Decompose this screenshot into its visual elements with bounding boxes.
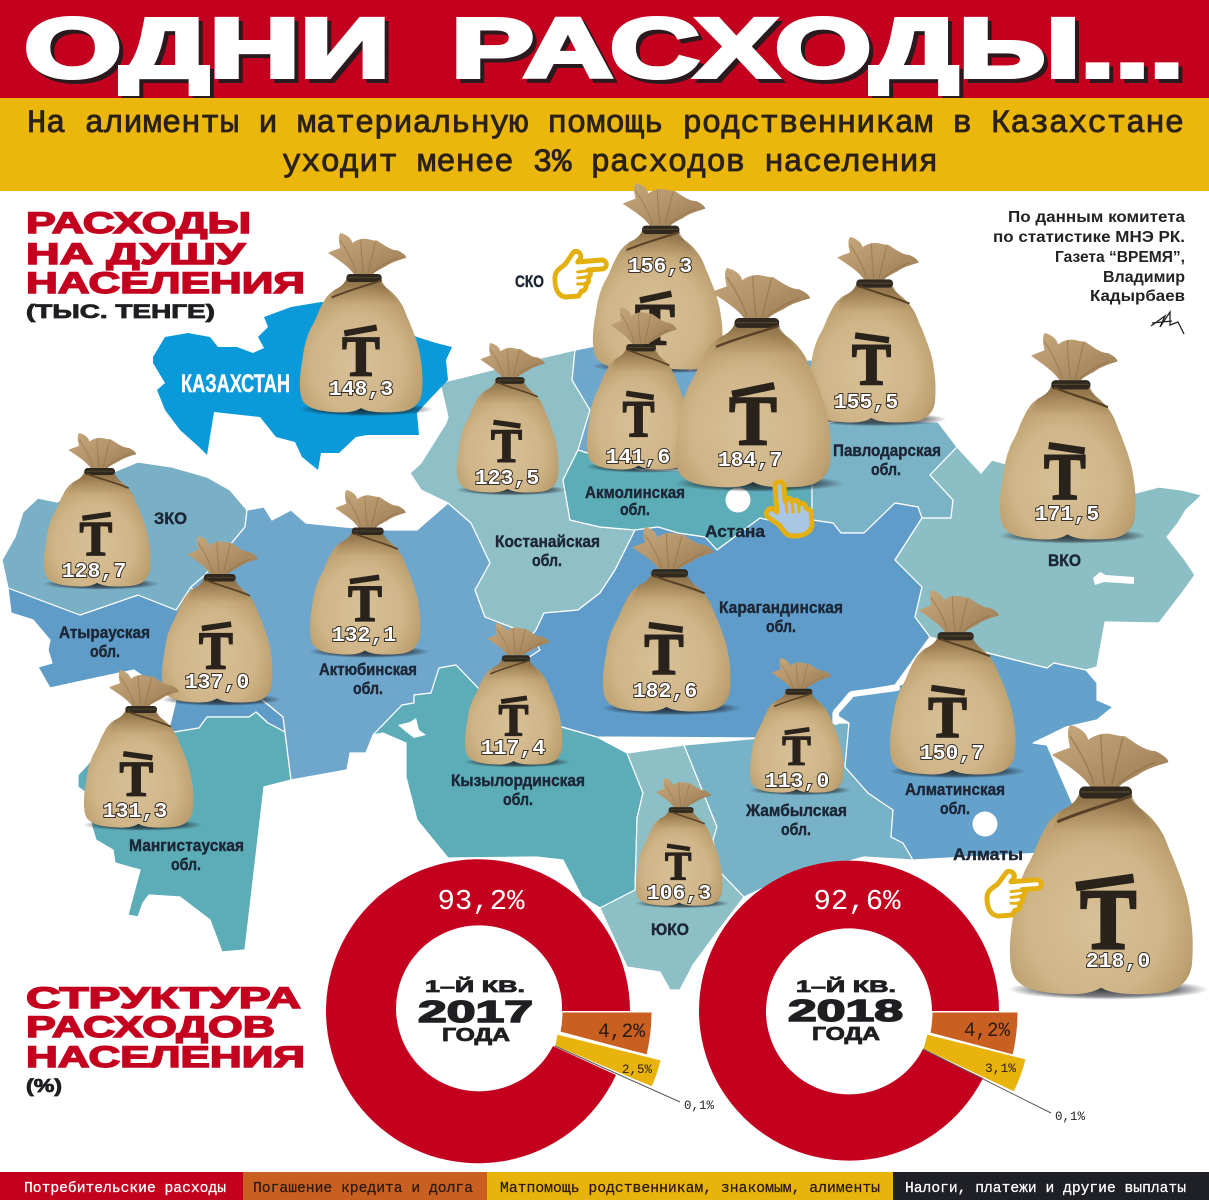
money bag: South Kazakhstan 106,3: 106,3: [647, 882, 711, 906]
region labels: ВКО: [1048, 551, 1081, 570]
money bag: Akmola 141,6: 141,6: [606, 446, 670, 470]
legend bar: Налоги, платежи и другие выплаты: [905, 1181, 1186, 1197]
region labels: обл.: [940, 799, 970, 818]
donut chart: 2017: 2017: [418, 994, 533, 1029]
money bag: Karaganda 182,6: [602, 527, 741, 715]
heading: spending structure: [26, 982, 305, 1096]
region labels: обл.: [503, 790, 533, 809]
money bag: Karaganda 182,6: Т: [644, 622, 683, 687]
legend bar: Погашение кредита и долга: [253, 1181, 473, 1197]
region: Almaty oblast: [833, 653, 1113, 860]
heading: spending structure: РАСХОДОВ: [26, 1011, 275, 1044]
donut chart: 2018: 2018: [788, 993, 903, 1028]
region labels: Жамбылская: [745, 801, 847, 820]
region labels: Костанайская: [495, 532, 600, 551]
region: West Kazakhstan: [2, 462, 247, 615]
region: Kostanay: [410, 350, 635, 635]
source credit: Кадырбаев: [1090, 288, 1185, 305]
donut chart: 2018: 4,2%: [964, 1020, 1011, 1043]
money bag: North Kazakhstan 156,3: [592, 183, 734, 373]
donut chart: 2017: 93,2%: [437, 885, 525, 918]
donut chart: 2018: 92,6%: [813, 885, 901, 918]
money bag: Akmola 141,6: [586, 307, 699, 473]
money bag: Atyrau 137,0: [161, 536, 282, 706]
title band: [0, 0, 1209, 99]
donut chart: 2017: 4,2%: [598, 1021, 646, 1044]
money bag: Mangystau 131,3: [83, 670, 203, 831]
region labels: Кызылординская: [451, 771, 585, 790]
money bag: North Kazakhstan 156,3: 156,3: [628, 255, 692, 279]
donut chart: 2018: 3,1%: [985, 1061, 1016, 1076]
heading: spending per capita: (ТЫС. ТЕНГЕ): [26, 302, 215, 323]
lake: Aral: [398, 718, 426, 738]
region labels: Атырауская: [59, 623, 150, 642]
leader line 0,1% 2017: [555, 1046, 680, 1102]
source credit: по статистике МНЭ РК.: [993, 229, 1185, 246]
lake: Balkhash: [836, 688, 897, 722]
donut chart: 2018: ГОДА: [812, 1024, 880, 1044]
money bag: North Kazakhstan 156,3: Т: [635, 291, 675, 357]
region labels: [59, 272, 1081, 939]
map of Kazakhstan regions: [2, 345, 1202, 990]
region labels: ЮКО: [651, 920, 689, 939]
label: Kazakhstan: КАЗАХСТАН: [181, 370, 290, 398]
mini map: Kazakhstan: [153, 302, 452, 470]
money bag: Almaty oblast 150,7: [889, 590, 1026, 778]
icon: hand pointing to North Kazakhstan: [555, 251, 606, 297]
donut chart: 2017: 2,5%: [622, 1062, 652, 1077]
money bag: Aktobe 132,1: 132,1: [332, 624, 396, 648]
money bag: Almaty oblast 150,7: Т: [928, 684, 967, 750]
donut chart: 2018: 1–Й КВ.: [796, 977, 896, 996]
region labels: СКО: [515, 272, 544, 291]
region labels: обл.: [781, 820, 811, 839]
region labels: ЗКО: [154, 509, 187, 528]
heading: spending per capita: НАСЕЛЕНИЯ: [26, 267, 305, 300]
money bag: East Kazakhstan 171,5: Т: [1044, 440, 1086, 513]
heading: spending structure: (%): [26, 1076, 62, 1096]
money bag: Kostanay 123,5: [456, 343, 567, 496]
region labels: обл.: [620, 500, 650, 519]
title band: ОДНИ: [24, 1, 390, 95]
donut chart: 2017: 1–Й КВ.: [425, 977, 525, 996]
money bag: West Kazakhstan 128,7: [43, 433, 160, 590]
money bag: Astana 184,7: Т: [729, 382, 777, 460]
money bag: West Kazakhstan 128,7: 128,7: [62, 560, 126, 584]
money bag: Zhambyl 113,0: Т: [782, 728, 811, 775]
money bag: Almaty 218,0: Т: [1080, 874, 1136, 968]
source credit: По данным комитета: [1008, 209, 1185, 226]
lake: Zaysan: [1093, 572, 1134, 585]
signature: [1151, 312, 1184, 334]
money bag: Aktobe 132,1: [309, 490, 430, 658]
money bag: Astana 184,7: 184,7: [718, 449, 782, 473]
source credit: [993, 209, 1185, 305]
subtitle band: уходит менее 3% расходов населения: [282, 144, 938, 181]
legend bar: [0, 1172, 1209, 1200]
heading: spending per capita: [26, 207, 305, 323]
region: Atyrau: [8, 587, 285, 733]
money bag: Almaty 218,0: 218,0: [1086, 950, 1150, 974]
money bag: Almaty 218,0: [1008, 725, 1208, 1000]
region: South Kazakhstan: [600, 745, 744, 990]
source credit: Газета “ВРЕМЯ”,: [1055, 249, 1185, 266]
subtitle band: На алименты и материальную помощь родственникам в Казахстане: [27, 105, 1184, 142]
legend bar: Потребительские расходы: [24, 1180, 226, 1197]
money bag: Kazakhstan 148,3: 148,3: [329, 378, 393, 402]
region: North Kazakhstan: [572, 345, 840, 470]
heading: spending per capita: НА ДУШУ: [26, 238, 246, 271]
donut chart: 2017: [326, 859, 714, 1163]
title band: ОДНИ: [28, 5, 394, 99]
money bag: South Kazakhstan 106,3: Т: [665, 843, 692, 889]
money bag: Astana 184,7: [674, 268, 844, 492]
icon: hand pointing to Almaty: [987, 871, 1041, 916]
money bag: Pavlodar 155,5: [807, 237, 946, 426]
region labels: Карагандинская: [719, 598, 843, 617]
Astana marker: [726, 488, 750, 512]
region labels: обл.: [171, 855, 201, 874]
region labels: обл.: [90, 642, 120, 661]
region labels: Акмолинская: [585, 483, 685, 502]
title band: РАСХОДЫ...: [455, 5, 1188, 99]
money bag: Akmola 141,6: Т: [623, 390, 654, 448]
money bag: Atyrau 137,0: 137,0: [185, 671, 249, 695]
money bag: Mangystau 131,3: 131,3: [103, 800, 167, 824]
money bag: West Kazakhstan 128,7: Т: [80, 512, 112, 566]
money bag: Pavlodar 155,5: 155,5: [834, 391, 898, 415]
segment: debt repayment 2018: [930, 1012, 1018, 1055]
money bag: Zhambyl 113,0: [749, 658, 851, 795]
leader line 0,1% 2018: [923, 1049, 1051, 1113]
region labels: Мангистауская: [129, 836, 244, 855]
region: Pavlodar: [760, 420, 957, 533]
segment: family aid 2017: [555, 1034, 661, 1087]
region labels: обл.: [532, 551, 562, 570]
money bag: Kazakhstan 148,3: [299, 233, 433, 416]
region labels: Актюбинская: [319, 660, 417, 679]
money bag: South Kazakhstan 106,3: [635, 778, 730, 908]
region: Kyzylorda: [373, 665, 643, 908]
legend bar: Матпомощь родственникам, знакомым, алименты: [500, 1181, 880, 1197]
region labels: Павлодарская: [833, 441, 941, 460]
money bag: Karaganda 182,6: 182,6: [633, 680, 697, 704]
money bag: Zhambyl 113,0: 113,0: [765, 770, 829, 794]
region: Akmola: [563, 450, 812, 550]
money bag: Kyzylorda 117,4: [464, 623, 571, 767]
region labels: обл.: [353, 679, 383, 698]
money bag: Kyzylorda 117,4: Т: [499, 695, 528, 746]
region labels: Алматы: [953, 845, 1023, 864]
donut chart: 2017: ГОДА: [442, 1025, 510, 1045]
region labels: обл.: [766, 617, 796, 636]
money bag: Pavlodar 155,5: Т: [852, 332, 891, 398]
heading: spending structure: СТРУКТУРА: [26, 982, 301, 1015]
donut chart: 2018: 0,1%: [1055, 1109, 1085, 1124]
region labels: обл.: [871, 460, 901, 479]
money bag: Kyzylorda 117,4: 117,4: [481, 737, 545, 761]
money bag: Aktobe 132,1: Т: [348, 575, 382, 633]
money bag: East Kazakhstan 171,5: [999, 333, 1147, 544]
region: Zhambyl: [684, 723, 913, 897]
title band: РАСХОДЫ...: [451, 1, 1184, 95]
heading: spending structure: НАСЕЛЕНИЯ: [26, 1041, 305, 1074]
segment: debt repayment 2017: [560, 1012, 652, 1055]
money bag: Kostanay 123,5: 123,5: [475, 467, 539, 491]
money bag: Mangystau 131,3: Т: [120, 750, 153, 806]
source credit: Владимир: [1103, 269, 1185, 286]
money bag: Atyrau 137,0: Т: [199, 622, 233, 681]
region: Mangystau: [78, 712, 291, 952]
money bag: East Kazakhstan 171,5: 171,5: [1035, 503, 1099, 527]
region: East Kazakhstan: [895, 447, 1202, 670]
region labels: Алматинская: [905, 780, 1005, 799]
donut chart: 2017: 0,1%: [684, 1098, 714, 1113]
money bag: Kostanay 123,5: Т: [491, 420, 522, 473]
money bag: Kazakhstan 148,3: Т: [342, 326, 380, 389]
subtitle band: [0, 98, 1209, 191]
icon: hand pointing to Astana: [766, 482, 812, 536]
money bag: Almaty oblast 150,7: 150,7: [920, 742, 984, 766]
region: Aktobe: [191, 503, 540, 780]
segment: family aid 2018: [923, 1034, 1026, 1092]
region: Karaganda: [480, 503, 930, 738]
heading: spending per capita: РАСХОДЫ: [26, 207, 251, 240]
donut chart: 2018: [699, 861, 1085, 1161]
Almaty marker: [972, 812, 998, 836]
region labels: Астана: [705, 522, 766, 541]
